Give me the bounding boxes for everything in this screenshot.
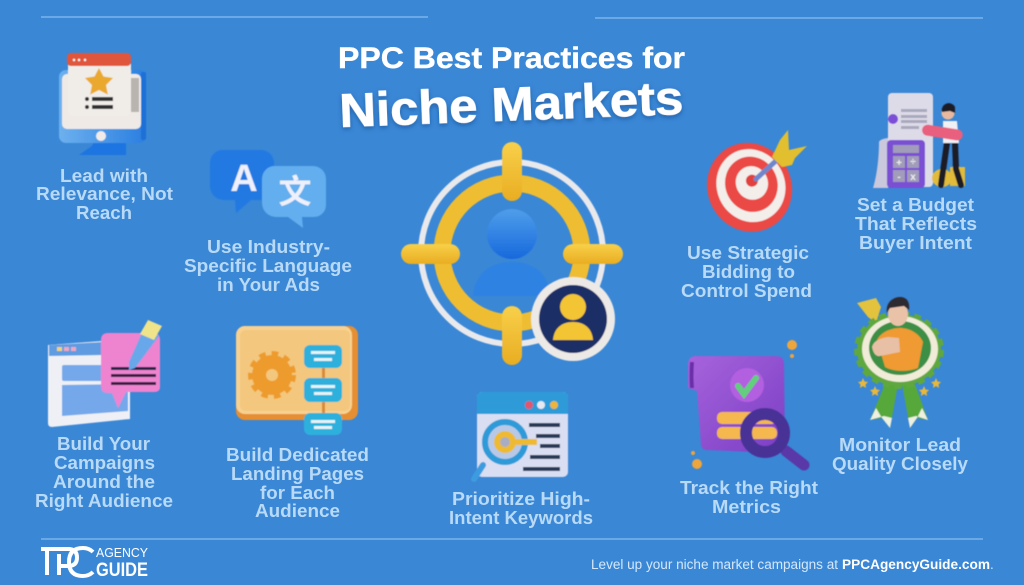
icon: dartboard xyxy=(692,129,807,246)
label: industry language xyxy=(184,237,352,295)
label: industry language: in Your Ads xyxy=(217,275,320,295)
label: lead quality: Quality Closely xyxy=(832,454,968,474)
icon: central target with person xyxy=(401,142,623,365)
icon: keyword search window xyxy=(474,392,568,479)
icon: rosette with person xyxy=(856,297,942,428)
icon: budget calculator and person: - xyxy=(897,172,901,183)
title xyxy=(338,42,685,137)
label: build campaigns: Campaigns xyxy=(54,453,155,473)
label: keywords: Prioritize High- xyxy=(452,489,590,509)
label: landing pages: Landing Pages xyxy=(231,464,364,484)
icon: budget calculator and person: + xyxy=(896,158,902,169)
footer call to action: Level up your niche market campaigns at xyxy=(591,557,838,572)
icon: metrics document with magnifier xyxy=(688,340,804,469)
footer call to action: . xyxy=(990,557,994,572)
icon: landing page board xyxy=(236,326,358,435)
label: landing pages xyxy=(226,445,369,521)
label: budget: Set a Budget xyxy=(857,195,974,215)
logo: AGENCY xyxy=(96,545,148,560)
label: lead with relevance xyxy=(36,166,173,223)
title: PPC Best Practices for xyxy=(338,42,685,75)
label: strategic bidding xyxy=(681,243,812,301)
icon: translate bubbles: 文 xyxy=(278,173,312,210)
label: metrics: Metrics xyxy=(712,497,781,517)
logo xyxy=(41,545,148,581)
icon: campaign window with pink note xyxy=(48,320,162,427)
label: landing pages: Audience xyxy=(255,501,340,521)
label: strategic bidding: Bidding to xyxy=(702,262,795,282)
label: build campaigns: Build Your xyxy=(57,434,150,454)
label: metrics: Track the Right xyxy=(680,478,818,498)
label: strategic bidding: Control Spend xyxy=(681,281,812,301)
label: budget xyxy=(855,195,977,253)
icon: translate bubbles xyxy=(210,150,326,228)
label: keywords: Intent Keywords xyxy=(449,508,593,528)
label: keywords xyxy=(449,489,593,528)
label: lead with relevance: Relevance, Not xyxy=(36,184,173,204)
label: landing pages: Build Dedicated xyxy=(226,445,369,465)
label: lead with relevance: Lead with xyxy=(60,166,148,186)
label: lead with relevance: Reach xyxy=(76,203,132,223)
title: Niche Markets xyxy=(338,71,684,137)
label: industry language: Use Industry- xyxy=(207,237,330,257)
icon: budget calculator and person xyxy=(873,93,965,188)
label: lead quality xyxy=(832,435,968,474)
label: metrics xyxy=(680,478,818,517)
label: build campaigns: Right Audience xyxy=(35,491,173,511)
label: build campaigns xyxy=(35,434,173,511)
label: budget: That Reflects xyxy=(855,214,977,234)
label: budget: Buyer Intent xyxy=(859,233,972,253)
icon: budget calculator and person: ÷ xyxy=(910,157,916,168)
footer call to action xyxy=(591,557,994,572)
label: build campaigns: Around the xyxy=(53,472,155,492)
label: lead quality: Monitor Lead xyxy=(839,435,961,455)
label: strategic bidding: Use Strategic xyxy=(687,243,809,263)
label: industry language: Specific Language xyxy=(184,256,352,276)
label: landing pages: for Each xyxy=(260,483,335,503)
icon: budget calculator and person: x xyxy=(910,172,916,183)
footer call to action: PPCAgencyGuide.com xyxy=(842,557,990,572)
logo: GUIDE xyxy=(96,560,148,581)
icon: monitor with star xyxy=(59,53,146,155)
icon: translate bubbles: A xyxy=(230,158,258,200)
